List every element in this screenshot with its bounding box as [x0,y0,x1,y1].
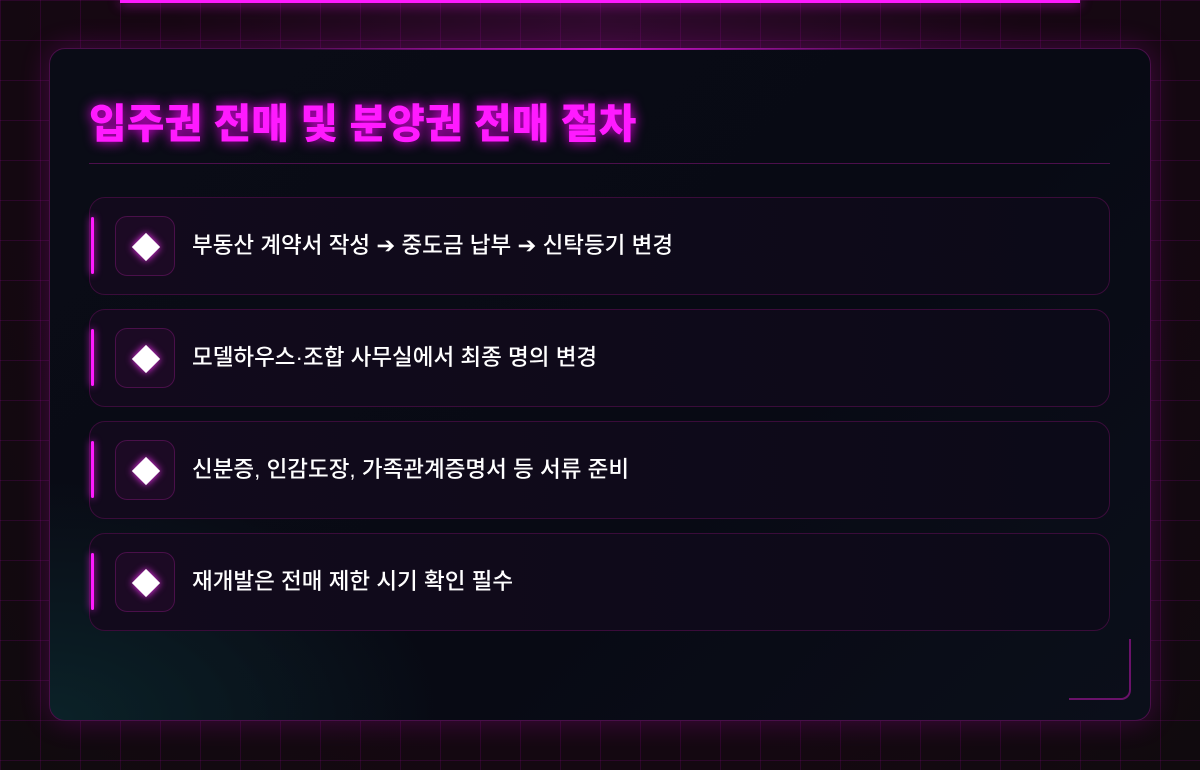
text: 재개발은 전매 제한 시기 확인 필수 [192,569,513,594]
icon: diamond [115,216,175,276]
item 1 [89,197,1110,295]
text: 신분증, 인감도장, 가족관계증명서 등 서류 준비 [192,457,629,482]
icon: diamond [115,552,175,612]
title: 입주권 전매 및 분양권 전매 절차 [89,101,636,147]
item 4 [89,533,1110,631]
icon: diamond [115,440,175,500]
text: 모델하우스·조합 사무실에서 최종 명의 변경 [192,345,597,370]
text: 부동산 계약서 작성 ➔ 중도금 납부 ➔ 신탁등기 변경 [192,233,673,258]
item 2 [89,309,1110,407]
icon: diamond [115,328,175,388]
item 3 [89,421,1110,519]
corner bracket [1069,639,1131,700]
